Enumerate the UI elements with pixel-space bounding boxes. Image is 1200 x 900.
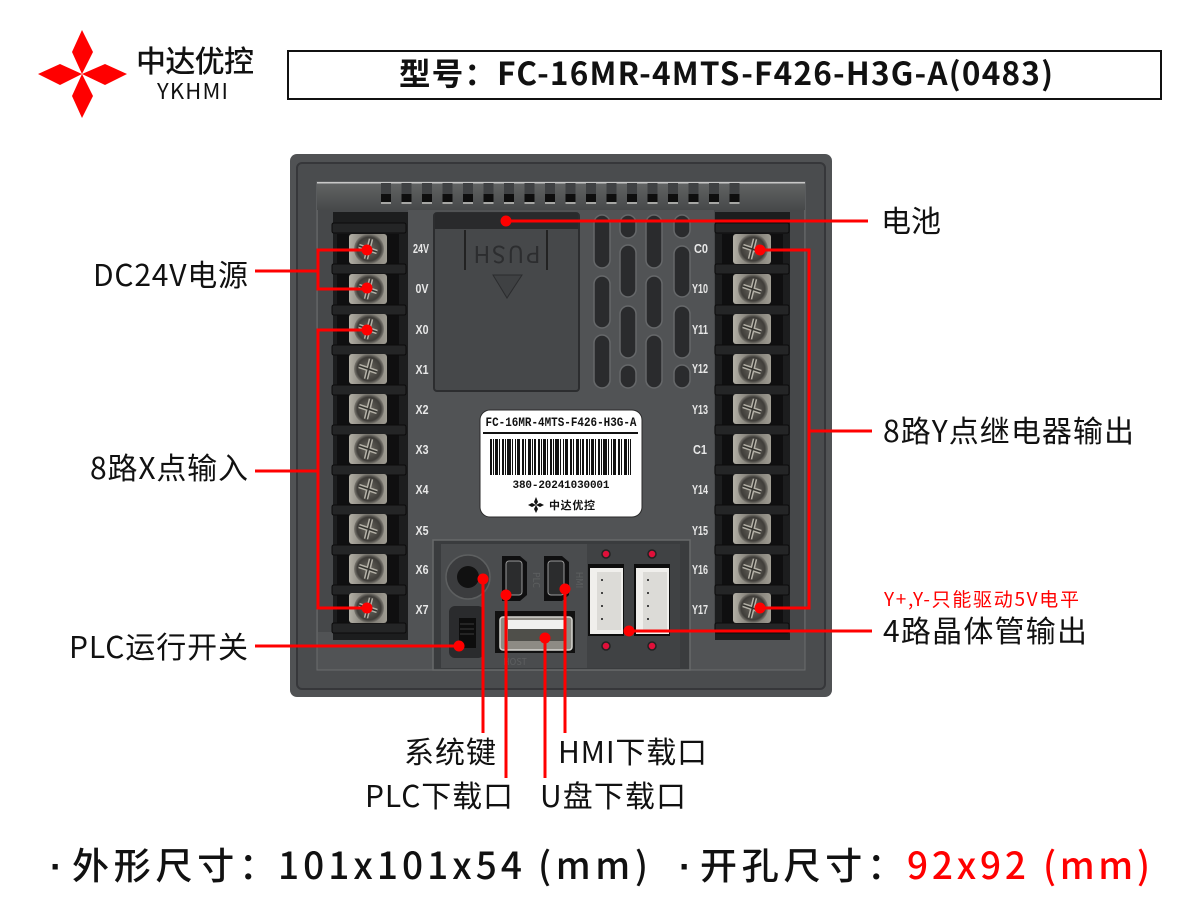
callout: USB drive download port: U盘下载口: [540, 772, 686, 816]
callout: X inputs: [90, 324, 372, 614]
transistor connectors: [588, 564, 670, 636]
left terminal block: [318, 210, 408, 640]
callout: HMI download port: [558, 584, 707, 772]
callout: DC24V power: DC24V电源: [93, 251, 248, 295]
logo latin name: YKHMI: [156, 74, 228, 106]
callout: PLC run switch: [69, 623, 464, 667]
right terminal labels: Y12: [692, 362, 708, 376]
right terminal labels: Y13: [692, 403, 708, 417]
outer dimensions label: 外形尺寸：: [72, 836, 276, 890]
outer dimensions label: 101x101x54: [278, 836, 522, 890]
panel: device rear view: [290, 154, 832, 697]
callout: system key: [404, 574, 496, 772]
sticker model: FC-16MR-4MTS-F426-H3G-A: [486, 416, 637, 430]
right terminal labels: C1: [693, 443, 707, 457]
system key button: [446, 555, 490, 599]
title box: [288, 49, 1161, 99]
cutout value: 92x92: [907, 836, 1026, 890]
logo wordmark: 中达优控: [136, 37, 254, 81]
PLC run switch: [449, 606, 484, 658]
outer dimensions label: ·: [50, 846, 62, 887]
callout: transistor outputs: 4路晶体管输出: [883, 607, 1087, 651]
right terminal labels: C0: [694, 242, 708, 256]
callout: USB drive download port: [540, 632, 686, 816]
callout: transistor outputs: [624, 607, 1087, 651]
cutout value: [907, 836, 1150, 890]
left terminal labels: X0: [416, 323, 429, 337]
barcode: [490, 439, 631, 475]
right terminal labels: Y15: [692, 524, 708, 538]
left terminal labels: 0V: [416, 282, 429, 296]
cutout value: (mm): [1043, 836, 1150, 890]
right terminal labels: Y10: [692, 282, 708, 296]
callout: battery: 电池: [881, 197, 941, 241]
callout: PLC run switch: PLC运行开关: [69, 623, 248, 667]
sticker logo: 中达优控: [549, 497, 595, 513]
top vent band: [317, 182, 805, 210]
PLC mini USB port: [502, 556, 543, 601]
callout: Y relay outputs: 8路Y点继电器输出: [883, 407, 1134, 451]
battery door: PUSH: [474, 239, 540, 273]
callout: system key: 系统键: [404, 728, 496, 772]
IO port panel: [433, 540, 690, 670]
device casing: [290, 154, 832, 697]
right terminal labels: Y14: [692, 483, 708, 497]
right terminal labels: Y16: [692, 563, 708, 577]
left terminal labels: 24V: [413, 242, 429, 256]
logo: [38, 30, 254, 118]
battery door: [434, 213, 579, 391]
recess: [317, 182, 805, 670]
icon: red four-point diamond: [38, 30, 127, 118]
left terminal labels: X5: [416, 524, 429, 538]
note: 5V level warning: Y+,Y-只能驱动5V电平: [883, 585, 1079, 612]
cutout dimensions label: 开孔尺寸：: [700, 836, 904, 890]
HMI mini USB port: HMI: [573, 572, 586, 588]
callout: HMI download port: HMI下载口: [558, 728, 707, 772]
callout: Y relay outputs: [754, 244, 1134, 614]
product label sticker: [480, 410, 642, 517]
callout: PLC download port: PLC下载口: [365, 772, 513, 816]
dimensions footer: [50, 836, 1150, 890]
right terminal labels: [692, 242, 708, 617]
right terminal block: [714, 210, 804, 640]
callout: PLC download port: [365, 590, 513, 816]
PLC mini USB port: PLC: [530, 572, 543, 588]
serial number: 380-20241030001: [512, 480, 610, 492]
left terminal labels: [413, 242, 429, 617]
callout: battery: [500, 197, 941, 241]
callout: DC24V power: [93, 244, 372, 295]
HMI mini USB port: [544, 556, 586, 601]
left terminal labels: X3: [416, 443, 429, 457]
outer dimensions label: [50, 836, 648, 890]
left terminal labels: X7: [416, 603, 429, 617]
USB host port: [495, 611, 575, 668]
USB host port: HOST: [503, 655, 527, 668]
ventilation slots: [594, 215, 690, 388]
cutout dimensions label: ·: [679, 846, 691, 887]
left terminal labels: X1: [416, 363, 429, 377]
right terminal labels: Y11: [692, 323, 708, 337]
left terminal labels: X4: [416, 483, 429, 497]
status LEDs: [602, 550, 656, 650]
sticker logo: [528, 497, 595, 513]
callout: X inputs: 8路X点输入: [90, 444, 248, 488]
outer dimensions label: (mm): [538, 836, 648, 890]
left terminal labels: X6: [416, 563, 429, 577]
title box: 型号：FC-16MR-4MTS-F426-H3G-A(0483): [399, 49, 1053, 95]
right terminal labels: Y17: [692, 603, 708, 617]
left terminal labels: X2: [416, 403, 429, 417]
